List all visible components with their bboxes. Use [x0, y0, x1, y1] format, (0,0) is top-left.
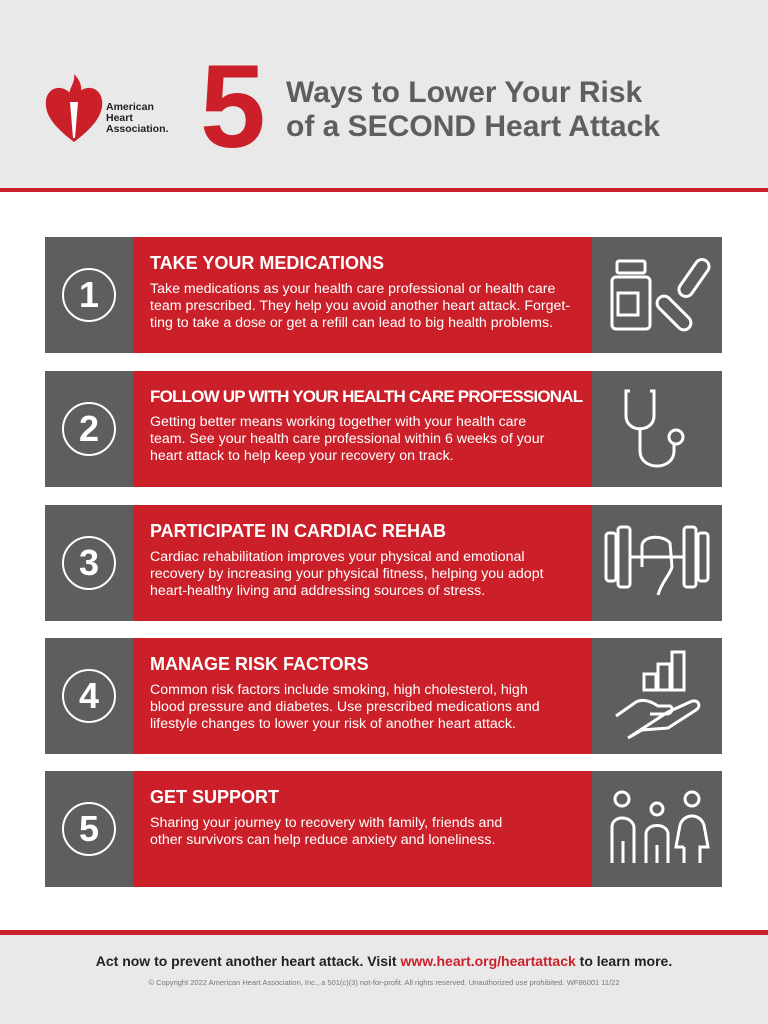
row 5 [45, 771, 722, 887]
logo: American [106, 101, 154, 113]
row 4 [45, 638, 722, 754]
row 3: heart-healthy living and addressing sources of stress. [150, 583, 485, 599]
row 2: 2 [79, 408, 99, 449]
row 5: other survivors can help reduce anxiety and loneliness. [150, 832, 495, 848]
row 1: ting to take a dose or get a refill can lead to big health problems. [150, 315, 553, 331]
row 3 [45, 505, 722, 621]
icon: stethoscope [592, 371, 722, 487]
row 2 [45, 371, 722, 487]
row 5: 5 [79, 808, 99, 849]
row 4: blood pressure and diabetes. Use prescribed medications and [150, 699, 540, 715]
row 3: Cardiac rehabilitation improves your physical and emotional [150, 549, 525, 565]
row 4: lifestyle changes to lower your risk of another heart attack. [150, 716, 516, 732]
row 2: team. See your health care professional within 6 weeks of your [150, 431, 544, 447]
big 5: 5 [200, 41, 266, 173]
copyright: © Copyright 2022 American Heart Association, Inc., a 501(c)(3) not-for-profit. All rights reserved. Unauthorized use prohibited. WF86001 11/22 [148, 978, 620, 987]
title: of a SECOND Heart Attack [286, 110, 660, 143]
row 2: FOLLOW UP WITH YOUR HEALTH CARE PROFESSIONAL [150, 387, 582, 406]
row 3: 3 [79, 542, 99, 583]
call to action: Act now to prevent another heart attack. Visit www.heart.org/heartattack to learn more. [96, 953, 672, 969]
row 3: recovery by increasing your physical fitness, helping you adopt [150, 566, 544, 582]
row 1: 1 [79, 274, 99, 315]
icon: family [592, 771, 722, 887]
title: Ways to Lower Your Risk [286, 76, 642, 109]
row 4: 4 [79, 675, 99, 716]
logo: Heart [106, 112, 133, 124]
icon: hand with chart [592, 638, 722, 754]
row 4: Common risk factors include smoking, high cholesterol, high [150, 682, 528, 698]
title [286, 76, 660, 143]
row 5: Sharing your journey to recovery with family, friends and [150, 815, 502, 831]
row 1 [45, 237, 722, 353]
row 1: team prescribed. They help you avoid another heart attack. Forget- [150, 298, 570, 314]
row 2: Getting better means working together with your health care [150, 414, 526, 430]
logo: Association. [106, 123, 168, 135]
icon: pills [592, 237, 722, 353]
row 3: PARTICIPATE IN CARDIAC REHAB [150, 521, 446, 541]
row 5: GET SUPPORT [150, 787, 279, 807]
icon: dumbbell [592, 505, 722, 621]
logo [46, 74, 168, 142]
row 1: TAKE YOUR MEDICATIONS [150, 253, 384, 273]
footer [0, 930, 768, 1024]
row 4: MANAGE RISK FACTORS [150, 654, 369, 674]
row 2: heart attack to help keep your recovery on track. [150, 448, 454, 464]
header band [0, 0, 768, 188]
row 1: Take medications as your health care professional or health care [150, 281, 555, 297]
